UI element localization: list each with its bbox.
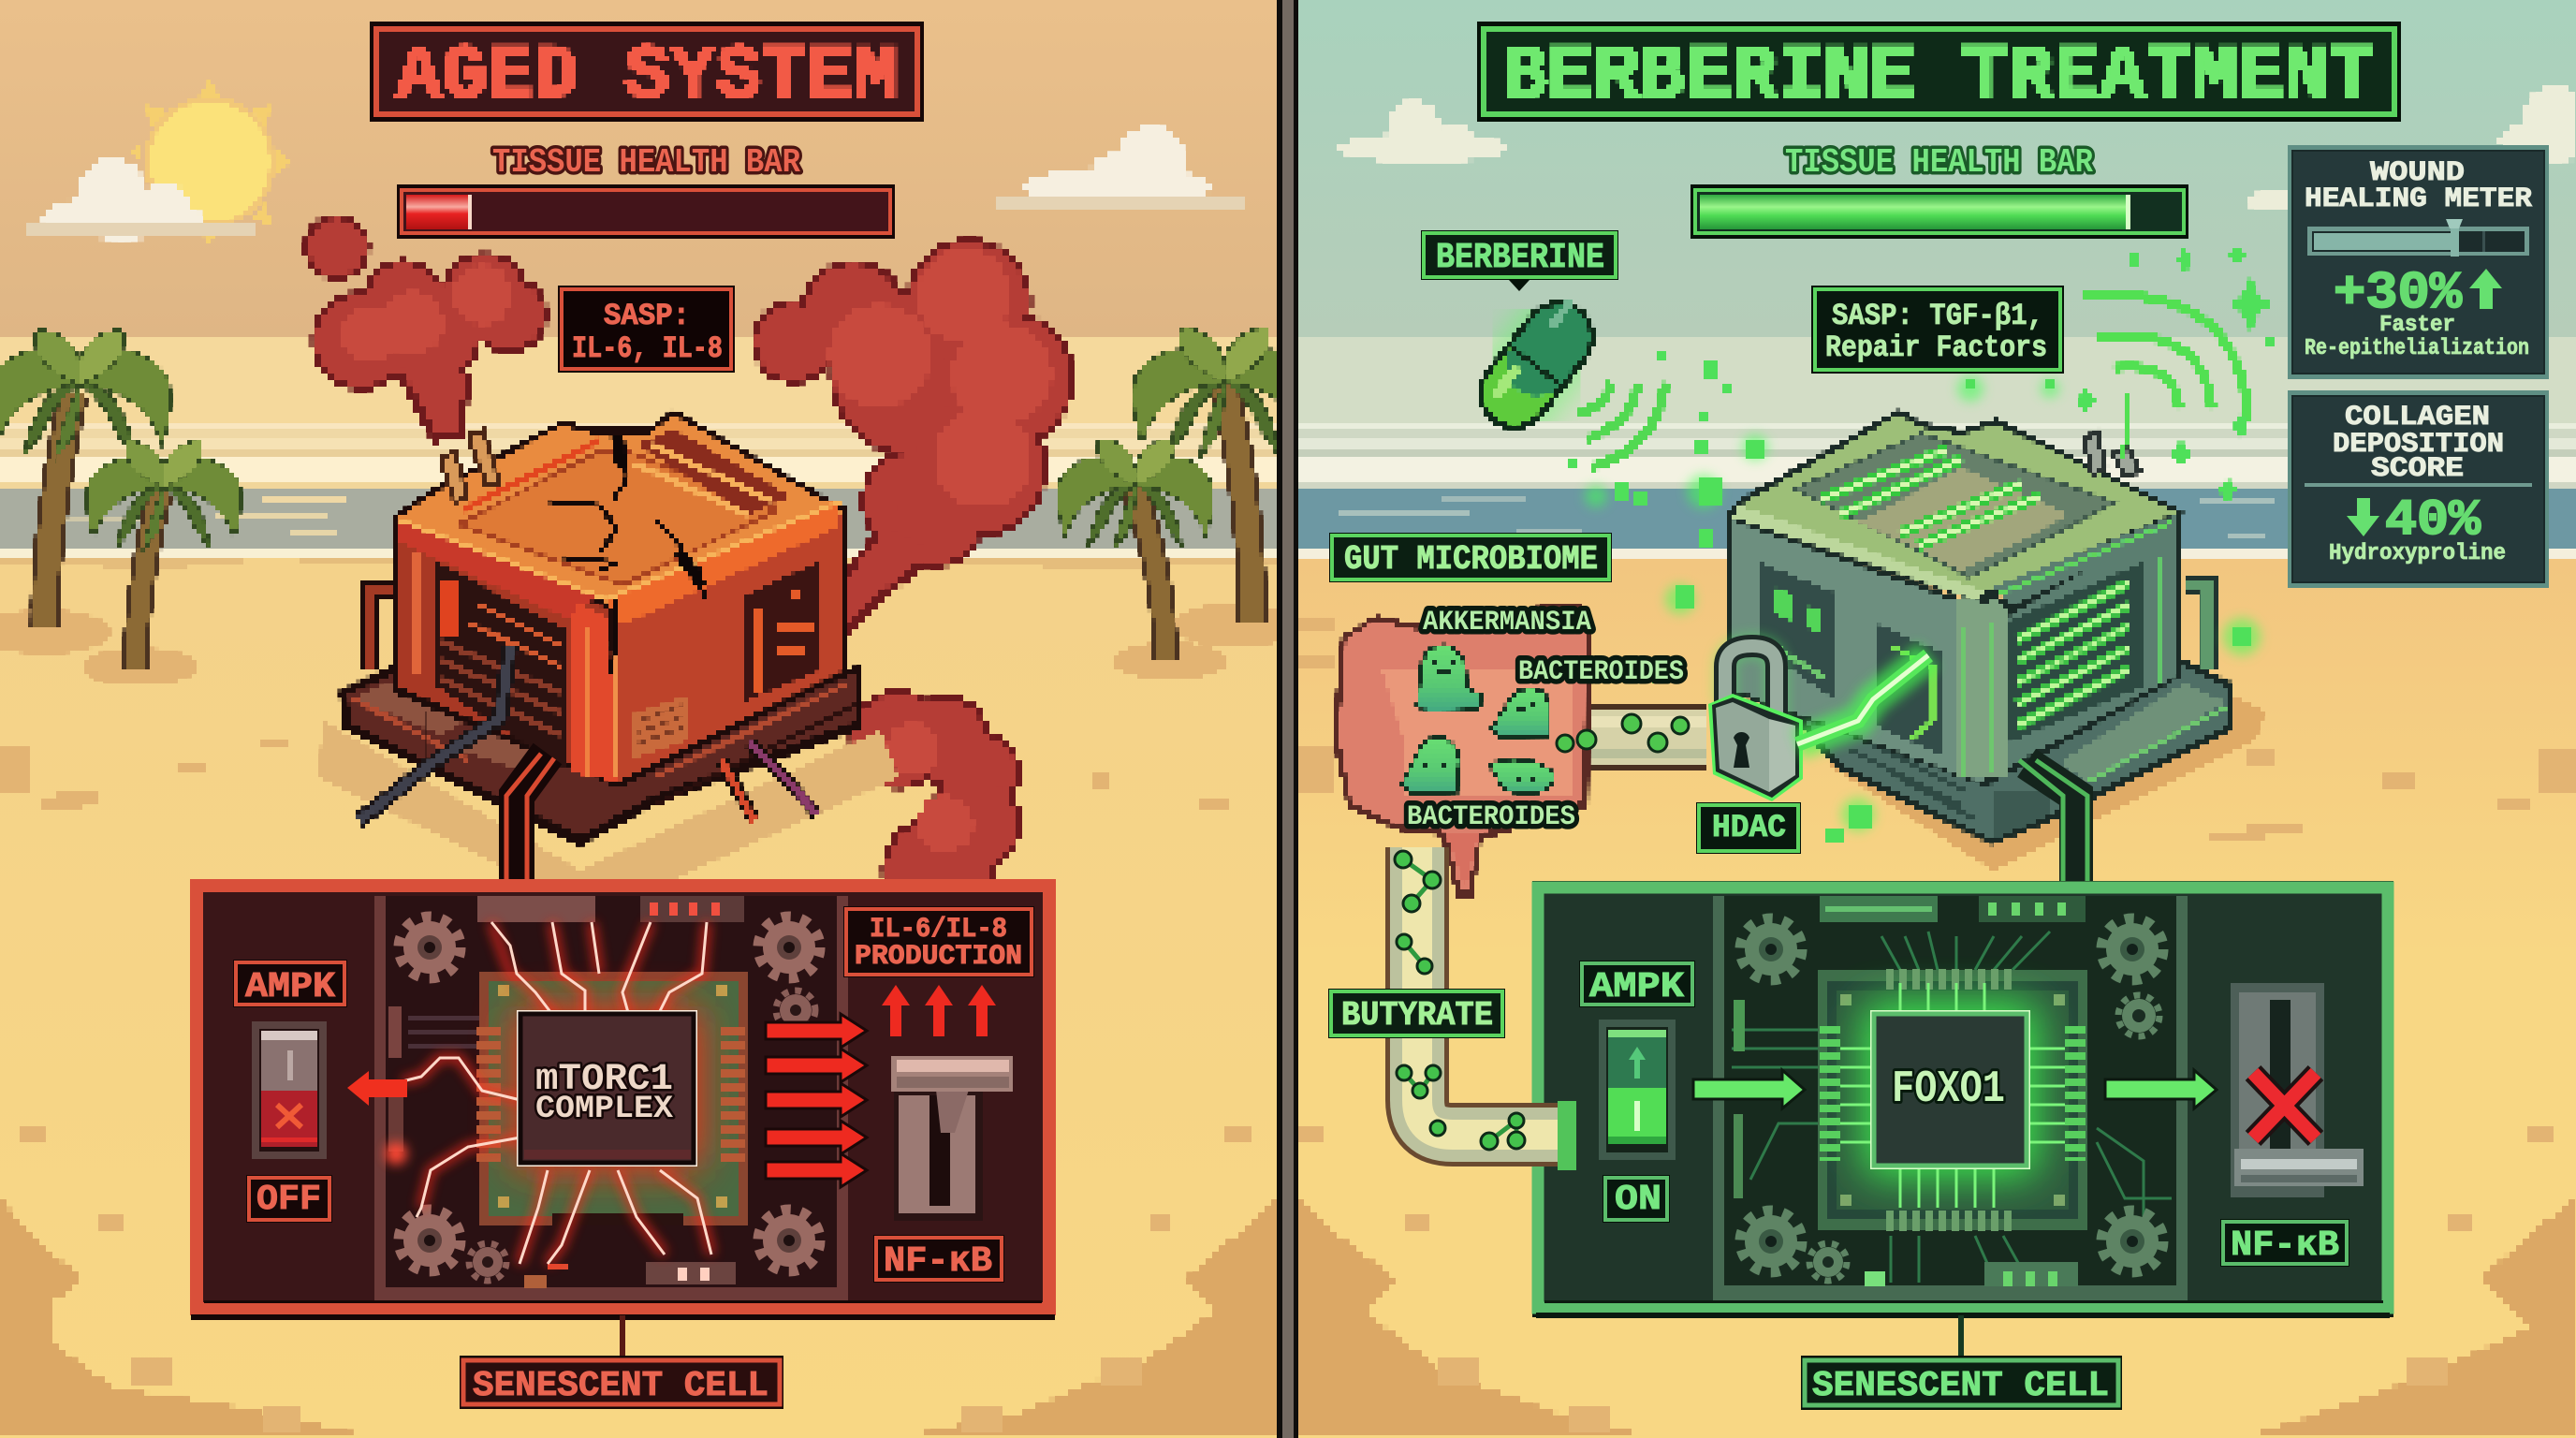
arrows: up to production [882, 985, 996, 1036]
label: tissue health bar aged: TISSUE HEALTH BAR [492, 143, 800, 182]
label: OFF [246, 1175, 332, 1223]
label: bacteroides lower: BACTEROIDES [1407, 801, 1575, 833]
center divider [1277, 0, 1298, 1438]
icon: berberine signal waves [1579, 382, 1665, 467]
machine handle [2184, 585, 2207, 669]
switch off [252, 1021, 327, 1159]
machine base [339, 663, 863, 846]
panel: collagen deposition score: DEPOSITION [2333, 429, 2504, 461]
title: berberine treatment: BERBERINE TREATMENT [1501, 33, 2376, 120]
label: NF-kB treated: NF-κB [2231, 1225, 2339, 1266]
label: AMPK on: AMPK [1589, 967, 1684, 1007]
circuit traces [1732, 932, 2172, 1283]
chip [517, 1010, 697, 1167]
machine shadow [1825, 693, 2265, 871]
label: IL-6/IL-8 production: IL-6/IL-8 [870, 914, 1007, 946]
label: bacteroides upper: BACTEROIDES [1518, 656, 1684, 688]
label: ON [1603, 1175, 1670, 1223]
health bar aged [397, 184, 895, 239]
illustration: aged machine [318, 409, 899, 913]
arrow: FOXO1 to NF-kB [2105, 1070, 2217, 1108]
label: HDAC [1696, 802, 1801, 854]
label: SASP aged [558, 286, 735, 373]
illustration: left red smoke clouds [307, 217, 1072, 922]
label: IL-6/IL-8 production: PRODUCTION [855, 941, 1022, 973]
icon: butyrate molecules in short pipe [1557, 714, 1689, 752]
pipe: butyrate to cell [1417, 847, 1576, 1170]
label: ON: ON [1615, 1180, 1661, 1220]
gears [1740, 918, 2163, 1281]
machine right face [608, 506, 848, 788]
label: akkermansia: AKKERMANSIA [1423, 607, 1591, 638]
gears [399, 917, 820, 1281]
machine antenna stubs [440, 431, 500, 502]
panel: collagen deposition score: SCORE [2371, 453, 2464, 485]
label: senescent cell aged [460, 1315, 783, 1409]
label: NF-kB aged [873, 1235, 1004, 1283]
chip board [1818, 970, 2087, 1230]
illustration: healing machine [1725, 409, 2265, 871]
label: senescent cell aged: SENESCENT CELL [473, 1366, 768, 1406]
chip label: COMPLEX [535, 1092, 674, 1127]
label: berberine [1421, 230, 1618, 291]
icon: berberine capsule [1498, 304, 1569, 393]
label: NF-kB treated [2220, 1219, 2349, 1267]
cable: left machine to panel [506, 754, 554, 899]
arrow down [2347, 498, 2379, 536]
lightning: lock to machine [1797, 655, 1928, 744]
panel: wound healing meter: WOUND [2370, 157, 2465, 189]
panel: wound healing meter: HEALING METER [2305, 183, 2532, 215]
arrow up [2469, 269, 2502, 309]
icon: gut bacteria [1402, 645, 1555, 794]
panel: wound healing meter [2288, 145, 2549, 379]
icon: padlock HDAC [1708, 646, 1803, 801]
panel: collagen deposition score: COLLAGEN [2345, 402, 2490, 433]
chip [1870, 1010, 2030, 1169]
pipe: gut to lock [1585, 704, 1706, 770]
icon: sparkles and particles [1569, 243, 2275, 842]
chip pins [489, 1027, 733, 1163]
chip board [479, 972, 748, 1225]
panel: senescent cell treated [1532, 881, 2393, 1318]
panel: collagen deposition score: Hydroxyproline [2329, 541, 2506, 566]
machine left face [1725, 515, 1989, 788]
icon: butyrate molecules in long pipe [1395, 851, 1525, 1150]
panel: wound healing meter: Faster [2379, 313, 2455, 338]
circuit section [1713, 896, 2188, 1300]
panel: collagen deposition score: 40% [2385, 492, 2481, 550]
label: HDAC: HDAC [1712, 811, 1786, 846]
arrow: AMPK to FOXO1 [1693, 1070, 1805, 1108]
machine antenna stubs [2085, 431, 2140, 477]
label: butyrate: BUTYRATE [1341, 996, 1493, 1034]
label: IL-6/IL-8 production [843, 906, 1034, 977]
machine left face [393, 517, 618, 788]
circuit section [374, 896, 848, 1300]
label: AMPK off [233, 960, 347, 1007]
connectors [388, 896, 744, 1288]
glow dot [385, 1142, 407, 1165]
machine right face [1984, 510, 2183, 788]
label: SASP repair factors: SASP: TGF-β1, [1832, 299, 2043, 333]
chip label [535, 1059, 674, 1127]
machine corner pillar [570, 599, 618, 782]
label: SASP aged: IL-6, IL-8 [572, 331, 723, 366]
icon: clouds left [28, 125, 1247, 240]
machine cracks [548, 440, 704, 674]
connectors [1734, 896, 2086, 1286]
cables [359, 646, 818, 821]
arrows: output [766, 1014, 867, 1187]
machine base [1769, 659, 2234, 845]
label: AMPK on [1579, 961, 1695, 1007]
panel: aged system scenery background [0, 0, 1277, 1438]
illustration: intestine [1332, 602, 1591, 899]
label: berberine: BERBERINE [1436, 238, 1604, 278]
machine top face [392, 409, 849, 625]
chip label: FOXO1 [1892, 1064, 2005, 1115]
title: aged system: AGED SYSTEM [396, 33, 899, 120]
panel: berberine scenery background [1297, 0, 2576, 1438]
label: SASP aged: SASP: [604, 299, 690, 333]
label: senescent cell treated: SENESCENT CELL [1812, 1366, 2109, 1406]
illustration: left palm trees [0, 328, 1315, 685]
machine top face [1725, 409, 2184, 606]
meter slider [2307, 219, 2529, 257]
chip green glow [1863, 1002, 2039, 1178]
label: gut microbiome: GUT MICROBIOME [1344, 540, 1598, 579]
label: tissue health bar treated: TISSUE HEALTH BAR [1785, 143, 2093, 182]
lever NF-kB aged [891, 1056, 1013, 1221]
panel: wound healing meter: Re-epithelialization [2305, 336, 2529, 361]
panel: collagen deposition score [2288, 390, 2549, 588]
lever NF-kB blocked [2231, 983, 2364, 1197]
cable: right machine to panel [2019, 760, 2087, 899]
panel: wound healing meter: +30% [2334, 263, 2462, 323]
machine side handle [370, 590, 393, 669]
label: OFF: OFF [256, 1180, 321, 1220]
label: SASP repair factors [1811, 286, 2064, 374]
chip pins [1830, 979, 2075, 1221]
machine shadow [318, 721, 899, 913]
chip label: mTORC1 [535, 1059, 673, 1101]
health bar treated [1690, 184, 2188, 239]
lightning [402, 922, 711, 1264]
machine corner pillar [1958, 588, 2007, 779]
icon: clouds right [1339, 85, 2576, 213]
icon: sun [131, 80, 292, 245]
icon: repair signal waves [2085, 295, 2248, 459]
icon: red X [2253, 1073, 2316, 1138]
label: SASP repair factors: Repair Factors [1825, 330, 2047, 365]
label: AMPK off: AMPK [245, 967, 335, 1007]
arrow: to AMPK [347, 1071, 407, 1106]
panel: senescent cell aged [191, 881, 1055, 1320]
label: NF-kB aged: NF-κB [884, 1241, 992, 1282]
switch on [1599, 1020, 1676, 1160]
label: senescent cell treated [1801, 1315, 2122, 1410]
chip traces glowing [1840, 983, 2065, 1208]
chip red glow [513, 1006, 702, 1170]
